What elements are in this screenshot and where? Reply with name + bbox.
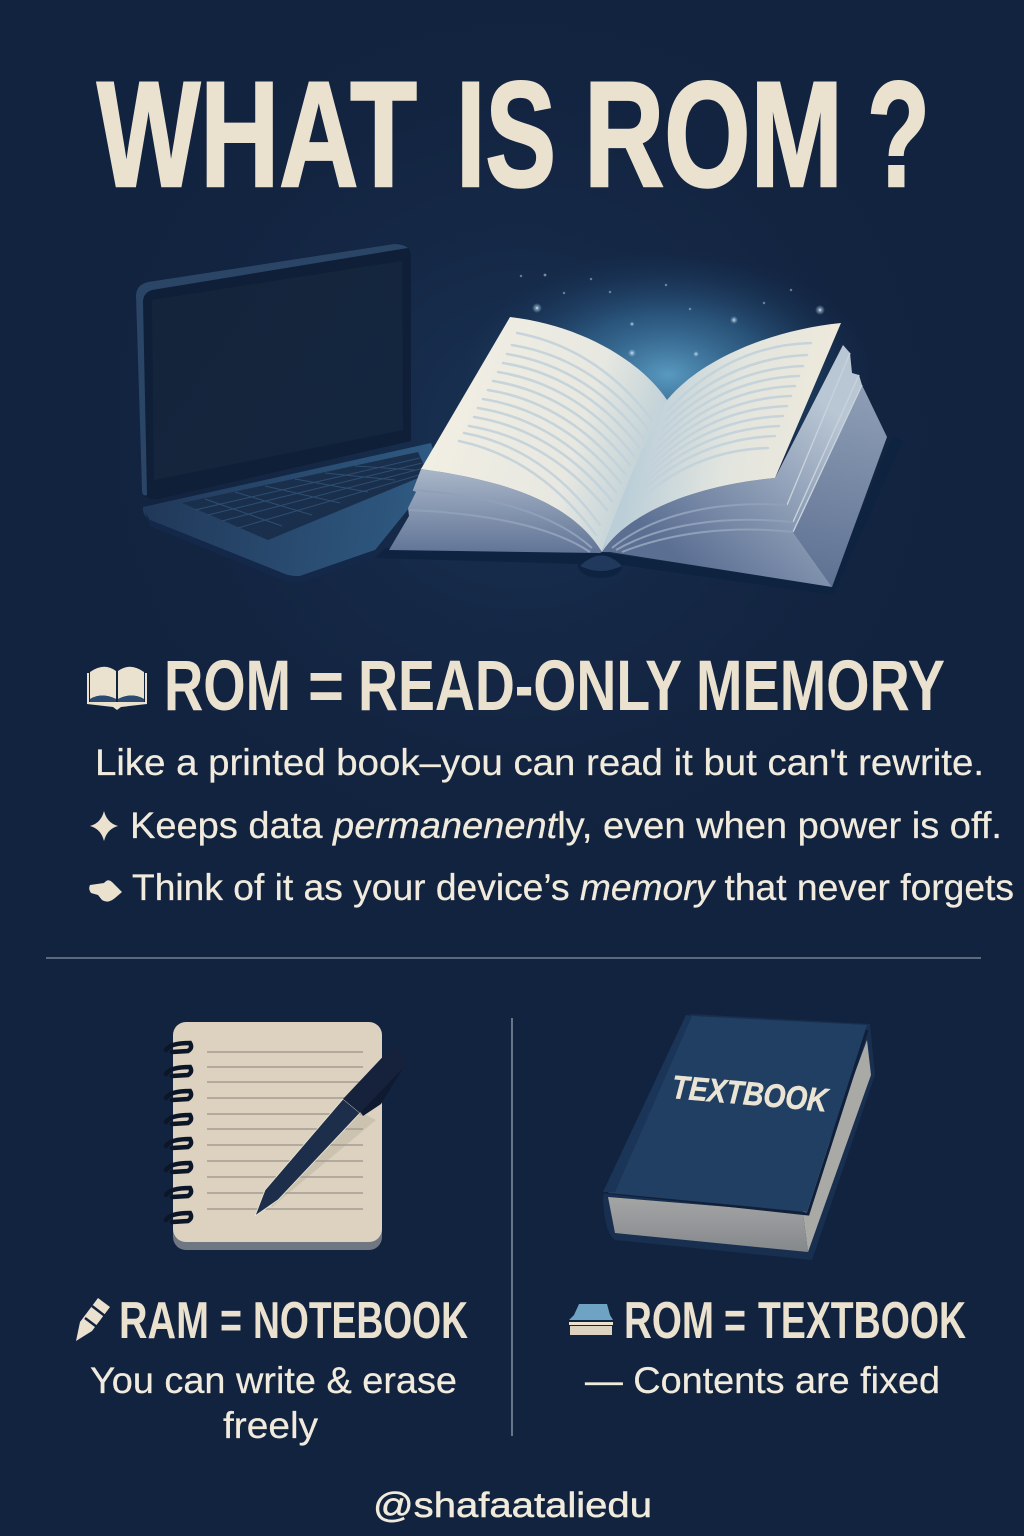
description line 2: Keeps data permanenently, even when power is off. [130, 805, 1002, 846]
panel: RAM = notebook: RAM [119, 1292, 209, 1350]
right page [602, 323, 841, 552]
panel: ROM = textbook [569, 1292, 966, 1401]
handle credit: @shafaataliedu [373, 1486, 652, 1525]
title: WHAT [97, 50, 417, 218]
title: IS [456, 50, 556, 218]
right page stack [602, 345, 862, 587]
panel: RAM = notebook: freely [223, 1405, 319, 1446]
heading: ROM = Read-only memory: = [308, 647, 344, 726]
book cover [375, 436, 903, 595]
icon: open book [375, 317, 903, 595]
panel: ROM = textbook: — Contents are fixed [585, 1360, 940, 1401]
panel: RAM = notebook [76, 1292, 468, 1446]
description line 1: Like a printed book–you can read it but can't rewrite. [95, 742, 984, 783]
spiral binding [166, 1043, 191, 1222]
right page side face [793, 385, 887, 587]
icon: book [87, 667, 147, 710]
icon: textbook [603, 1014, 875, 1260]
icon: pencil [76, 1298, 110, 1341]
icon: notebook with pen [166, 1022, 406, 1250]
left page stack [389, 469, 602, 553]
heading: ROM = Read-only memory [87, 647, 945, 726]
left page [421, 317, 667, 552]
glow behind book [463, 250, 873, 500]
pen [255, 1047, 406, 1216]
description line 3: Think of it as your device’s memory that never forgets [132, 867, 1014, 908]
title [97, 50, 930, 218]
panel: RAM = notebook: = [220, 1292, 242, 1350]
panel: RAM = notebook: You can write & erase [90, 1360, 457, 1401]
title: ROM [584, 50, 843, 218]
heading: ROM = Read-only memory: MEMORY [696, 647, 945, 726]
title: ? [867, 50, 930, 218]
icon: sparkle [90, 811, 118, 841]
page text lines [459, 333, 811, 535]
icon: laptop [136, 244, 440, 582]
hero illustration: laptop and open book [136, 244, 903, 595]
icon: stacked book [569, 1304, 613, 1335]
panel: ROM = textbook: ROM [624, 1292, 714, 1350]
heading: ROM = Read-only memory: ROM [164, 647, 291, 726]
panel: ROM = textbook: = [724, 1292, 746, 1350]
sparkles [519, 273, 825, 357]
icon: pointing hand [89, 880, 122, 902]
textbook cover title: TEXTBOOK [670, 1068, 831, 1119]
heading: ROM = Read-only memory: READ-ONLY [358, 647, 682, 726]
panel: RAM = notebook: NOTEBOOK [253, 1292, 468, 1350]
